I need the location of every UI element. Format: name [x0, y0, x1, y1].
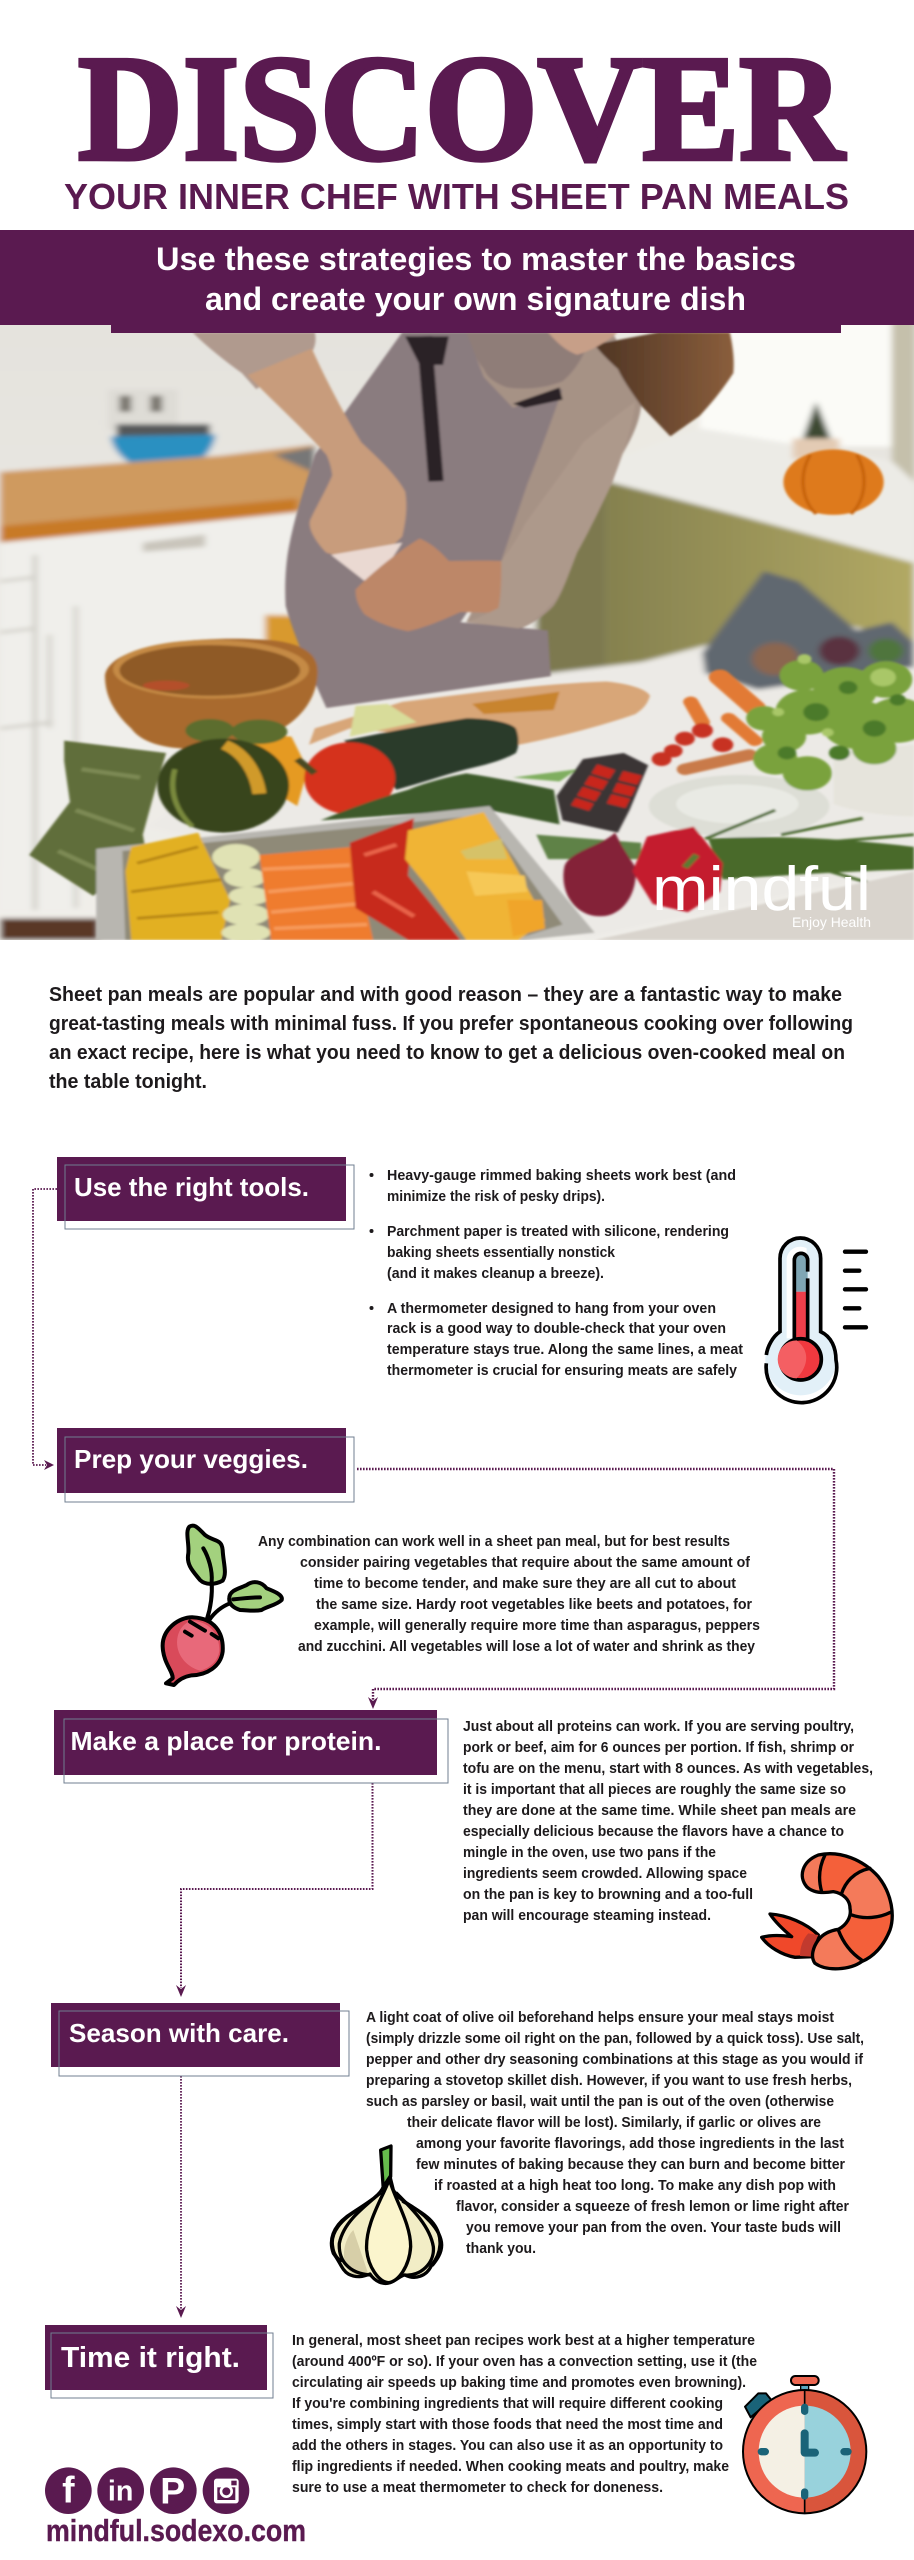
- connector arrow: protein to season: [176, 1783, 372, 1997]
- text: season paragraph: such as parsley or basil, wait until the pan is out of the oven (otherwise: [366, 2093, 834, 2110]
- text: protein paragraph: especially delicious because the flavors have a chance to: [463, 1823, 844, 1840]
- connector arrow: season to time: [176, 2076, 186, 2318]
- text: tools bullets: minimize the risk of pesky drips).: [387, 1188, 605, 1205]
- text: tools bullets: rack is a good way to double-check that your oven: [387, 1320, 726, 1337]
- text: veggies paragraph: Any combination can work well in a sheet pan meal, but for best results: [258, 1533, 730, 1550]
- text: veggies paragraph: [258, 1533, 760, 1655]
- text: season paragraph: pepper and other dry seasoning combinations at this stage as you would if: [366, 2051, 864, 2068]
- intro paragraph: the table tonight.: [49, 1071, 207, 1093]
- text: time paragraph: add the others in stages. You can also use it as an opportunity to: [292, 2437, 723, 2454]
- heading: Use the right tools: Use the right tools.: [74, 1172, 309, 1202]
- heading: Season with care: [51, 2003, 349, 2076]
- text: season paragraph: their delicate flavor will be lost). Similarly, if garlic or olives are: [407, 2114, 821, 2131]
- social icons: [45, 2467, 249, 2514]
- banner: [0, 230, 914, 333]
- intro paragraph: great-tasting meals with minimal fuss. If you prefer spontaneous cooking over following: [49, 1013, 853, 1035]
- heading: Prep your veggies: [57, 1428, 354, 1502]
- text: season paragraph: preparing a stovetop skillet dish. However, if you want to use fresh herbs,: [366, 2072, 852, 2089]
- icon: thermometer: [765, 1238, 866, 1403]
- social icons: P: [160, 2469, 185, 2511]
- text: tools bullets: Heavy-gauge rimmed baking sheets work best (and: [387, 1167, 736, 1184]
- text: season paragraph: you remove your pan from the oven. Your taste buds will: [466, 2219, 841, 2236]
- social icons: f: [62, 2469, 75, 2511]
- banner: Use these strategies to master the basics: [156, 241, 796, 277]
- text: protein paragraph: pan will encourage steaming instead.: [463, 1907, 711, 1924]
- text: protein paragraph: ingredients seem crowded. Allowing space: [463, 1865, 747, 1882]
- connector arrow: veggies to protein: [357, 1469, 834, 1709]
- icon: stopwatch: [743, 2376, 866, 2513]
- text: protein paragraph: it is important that all pieces are roughly the same size so: [463, 1781, 846, 1798]
- text: tools bullets: A thermometer designed to hang from your oven: [387, 1300, 716, 1317]
- text: season paragraph: thank you.: [466, 2240, 536, 2257]
- heading: Make a place for protein: [54, 1710, 448, 1783]
- text: season paragraph: (simply drizzle some oil right on the pan, followed by a quick toss). Use salt,: [366, 2030, 864, 2047]
- text: veggies paragraph: example, will generally require more time than asparagus, peppers: [314, 1617, 760, 1634]
- photo logo: mindful Enjoy Health: Enjoy Health: [792, 914, 871, 930]
- heading: Season with care: Season with care.: [69, 2018, 289, 2048]
- heading: Prep your veggies: Prep your veggies.: [74, 1444, 308, 1474]
- heading: Time it right: Time it right.: [61, 2342, 240, 2374]
- heading: Use the right tools: [57, 1157, 354, 1229]
- text: veggies paragraph: consider pairing vegetables that require about the same amount of: [300, 1554, 751, 1571]
- text: tools bullets: (and it makes cleanup a breeze).: [387, 1265, 604, 1282]
- photo logo: mindful Enjoy Health: mindful: [652, 855, 871, 924]
- text: time paragraph: In general, most sheet pan recipes work best at a higher temperature: [292, 2332, 755, 2349]
- text: time paragraph: circulating air speeds up baking time and promotes even browning).: [292, 2374, 746, 2391]
- social icons: in: [108, 2476, 133, 2508]
- text: protein paragraph: mingle in the oven, use two pans if the: [463, 1844, 716, 1861]
- text: veggies paragraph: the same size. Hardy root vegetables like beets and potatoes, for: [316, 1596, 752, 1613]
- banner: and create your own signature dish: [205, 281, 746, 317]
- heading: Time it right: [45, 2325, 273, 2398]
- text: season paragraph: flavor, consider a squeeze of fresh lemon or lime right after: [456, 2198, 849, 2215]
- text: tools bullets: [370, 1167, 743, 1379]
- text: protein paragraph: on the pan is key to browning and a too-full: [463, 1886, 753, 1903]
- text: protein paragraph: they are done at the same time. While sheet pan meals are: [463, 1802, 856, 1819]
- text: protein paragraph: tofu are on the menu, start with 8 ounces. As with vegetables,: [463, 1760, 873, 1777]
- intro paragraph: [49, 984, 853, 1093]
- text: time paragraph: (around 400ºF or so). If your oven has a convection setting, use it (the: [292, 2353, 757, 2370]
- text: tools bullets: thermometer is crucial for ensuring meats are safely: [387, 1362, 738, 1379]
- photo: woman seasoning vegetables in a kitchen: [0, 325, 914, 940]
- connector arrow: tools to veggies: [33, 1189, 57, 1470]
- text: tools bullets: temperature stays true. Along the same lines, a meat: [387, 1341, 743, 1358]
- icon: garlic: [331, 2146, 442, 2283]
- heading: Make a place for protein: Make a place for protein.: [70, 1726, 382, 1756]
- text: protein paragraph: [463, 1718, 873, 1924]
- text: tools bullets: Parchment paper is treated with silicone, rendering: [387, 1223, 729, 1240]
- text: time paragraph: times, simply start with those foods that need the most time and: [292, 2416, 723, 2433]
- text: time paragraph: If you're combining ingredients that will require different cooking: [292, 2395, 723, 2412]
- text: season paragraph: few minutes of baking because they can burn and become bitter: [416, 2156, 845, 2173]
- text: season paragraph: among your favorite flavorings, add those ingredients in the last: [416, 2135, 844, 2152]
- text: veggies paragraph: and zucchini. All vegetables will lose a lot of water and shrink as they: [298, 1638, 756, 1655]
- text: season paragraph: [366, 2009, 864, 2257]
- intro paragraph: an exact recipe, here is what you need to know to get a delicious oven-cooked meal on: [49, 1042, 845, 1064]
- text: season paragraph: A light coat of olive oil beforehand helps ensure your meal stays moist: [366, 2009, 834, 2026]
- text: time paragraph: sure to use a meat thermometer to check for doneness.: [292, 2479, 663, 2496]
- text: veggies paragraph: time to become tender, and make sure they are all cut to about: [314, 1575, 736, 1592]
- title: DISCOVER: [78, 24, 846, 192]
- icon: shrimp: [762, 1854, 892, 1969]
- website url: mindful.sodexo.com: [46, 2513, 306, 2548]
- text: tools bullets: baking sheets essentially nonstick: [387, 1244, 616, 1261]
- icon: radish: [163, 1526, 282, 1685]
- intro paragraph: Sheet pan meals are popular and with good reason – they are a fantastic way to make: [49, 984, 842, 1006]
- text: protein paragraph: Just about all proteins can work. If you are serving poultry,: [463, 1718, 854, 1735]
- text: time paragraph: [292, 2332, 757, 2496]
- text: season paragraph: if roasted at a high heat too long. To make any dish pop with: [434, 2177, 836, 2194]
- text: time paragraph: flip ingredients if needed. When cooking meats and poultry, make: [292, 2458, 729, 2475]
- subtitle: YOUR INNER CHEF WITH SHEET PAN MEALS: [64, 176, 849, 217]
- text: protein paragraph: pork or beef, aim for 6 ounces per portion. If fish, shrimp or: [463, 1739, 854, 1756]
